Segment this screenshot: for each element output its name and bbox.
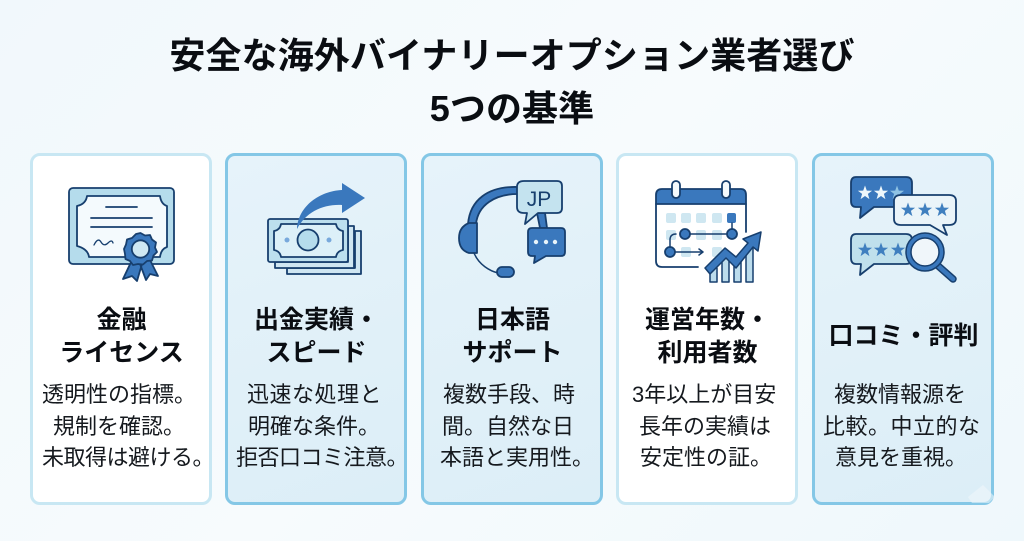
heading: 日本語サポート: サポート (462, 339, 562, 367)
text: 運営年数 description (632, 382, 776, 470)
icon: money and arrow (268, 183, 365, 274)
panel: 出金実績・スピード (225, 153, 407, 504)
heading: 出金実績・スピード: スピード (266, 339, 366, 367)
heading: 出金実績・スピード (254, 306, 379, 367)
text: 金融ライセンス description: 未取得は避ける。 (42, 445, 214, 470)
heading: 出金実績・スピード: 出金実績・ (254, 306, 379, 334)
title: 安全な海外バイナリーオプション業者選び (169, 35, 855, 76)
heading: 金融ライセンス (59, 306, 184, 367)
text: 運営年数 description: 長年の実績は (639, 414, 771, 439)
icon: calendar and growth chart (656, 181, 761, 282)
text: 金融ライセンス description (42, 382, 214, 470)
text: 日本語サポート description: 間。自然な日 (442, 414, 574, 439)
text: 運営年数 description: 3年以上が目安 (632, 382, 776, 407)
heading: 金融ライセンス: 金融 (96, 306, 146, 334)
heading: 運営年数・利用者数 (645, 306, 770, 367)
text: 口コミ・評判 description: 複数情報源を (834, 382, 966, 407)
text: 運営年数 description: 安定性の証。 (640, 445, 772, 470)
icon: review bubbles with magnifier (851, 177, 956, 279)
text: 口コミ・評判 description: 意見を重視。 (835, 445, 967, 470)
heading: 運営年数・利用者数: 運営年数・ (645, 306, 770, 334)
heading: 日本語サポート (462, 306, 562, 367)
panel: 金融ライセンス (30, 153, 212, 504)
title (169, 35, 855, 129)
icon: certificate (69, 188, 174, 281)
panel: 口コミ・評判 (812, 153, 994, 504)
text: 日本語サポート description (440, 382, 594, 470)
panel: 日本語サポート (421, 153, 603, 504)
text: 金融ライセンス description: 規制を確認。 (53, 414, 185, 439)
heading: 金融ライセンス: ライセンス (59, 339, 184, 367)
text: 出金実績 description (236, 382, 408, 470)
icon: headset and speech bubbles (459, 181, 565, 277)
heading: 日本語サポート: 日本語 (475, 306, 550, 334)
text: 口コミ・評判 description (823, 382, 981, 470)
text: 日本語サポート description: 本語と実用性。 (440, 445, 594, 470)
heading: 運営年数・利用者数: 利用者数 (657, 339, 758, 367)
text: 金融ライセンス description: 透明性の指標。 (42, 382, 196, 407)
panel: 運営年数・利用者数 (616, 153, 798, 504)
text: 出金実績 description: 迅速な処理と (247, 382, 382, 407)
text: JP: JP (527, 188, 551, 211)
text: 日本語サポート description: 複数手段、時 (443, 382, 575, 407)
title: 5つの基準 (430, 88, 594, 129)
text: 出金実績 description: 拒否口コミ注意。 (236, 445, 408, 470)
heading: 口コミ・評判: 口コミ・評判 (828, 322, 978, 350)
text: 出金実績 description: 明確な条件。 (248, 414, 380, 439)
text: 口コミ・評判 description: 比較。中立的な (823, 414, 981, 439)
